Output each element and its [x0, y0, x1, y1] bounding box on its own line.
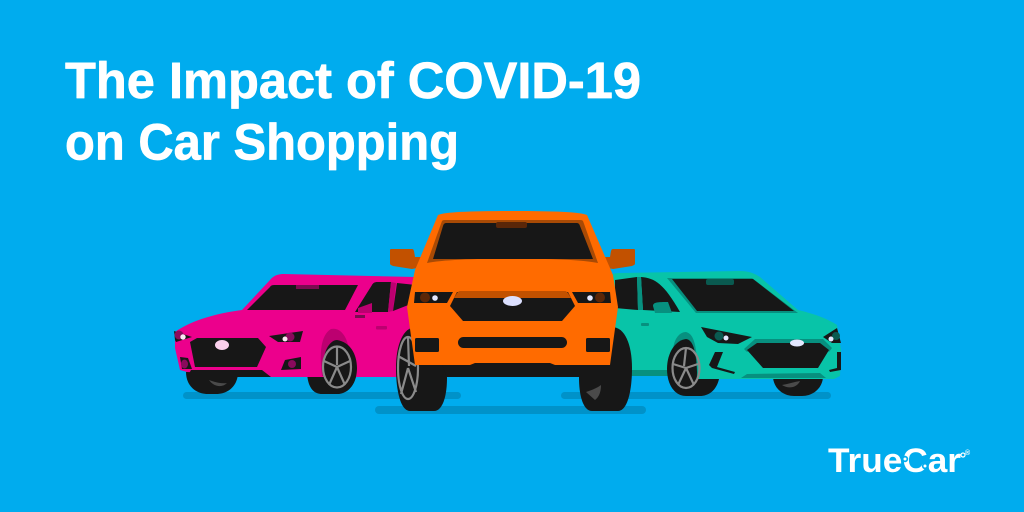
teal car wheel arch [673, 332, 698, 378]
pink car rim [323, 346, 351, 388]
teal car side windows [615, 277, 638, 310]
teal car wheels [680, 370, 823, 396]
pink car near tyre [323, 340, 357, 394]
pink car lower lip [187, 370, 271, 377]
pink car grille [190, 338, 266, 367]
title: The Impact of COVID-19 [65, 52, 641, 109]
pink car wheels [186, 360, 357, 394]
pink car wheel arch [321, 329, 348, 377]
truck grille [450, 292, 575, 321]
truck body [407, 211, 618, 365]
TrueCar logo: ® [965, 449, 971, 457]
TrueCar logo: TrueCar [828, 442, 961, 480]
pink car fog lamps [180, 357, 301, 370]
pink car side windows [355, 282, 391, 312]
truck windshield [427, 220, 598, 263]
pink car body [175, 274, 416, 377]
pink car windshield [247, 285, 358, 310]
title [65, 52, 641, 170]
truck underbody [440, 360, 590, 377]
truck rim [398, 337, 418, 399]
pink car [174, 274, 416, 394]
teal car near tyre [667, 339, 697, 396]
truck mirrors [390, 249, 635, 269]
pink car mirror [358, 303, 372, 313]
ground shadows [183, 392, 831, 414]
teal car fog vents [709, 352, 841, 374]
teal car windshield [667, 278, 798, 313]
teal car rim [672, 348, 700, 388]
truck logo [503, 296, 522, 306]
truck wheels [396, 327, 632, 411]
title: on Car Shopping [65, 114, 459, 170]
pink car headlights [174, 330, 303, 342]
orange truck [390, 211, 635, 411]
truck fog lamps [415, 337, 610, 352]
teal car body [605, 271, 841, 379]
teal car lower lip [741, 373, 826, 378]
teal car [605, 271, 841, 396]
truck headlights [414, 292, 611, 303]
teal car grille [744, 339, 832, 352]
teal car mirror [653, 302, 672, 313]
teal car headlights [701, 327, 841, 344]
